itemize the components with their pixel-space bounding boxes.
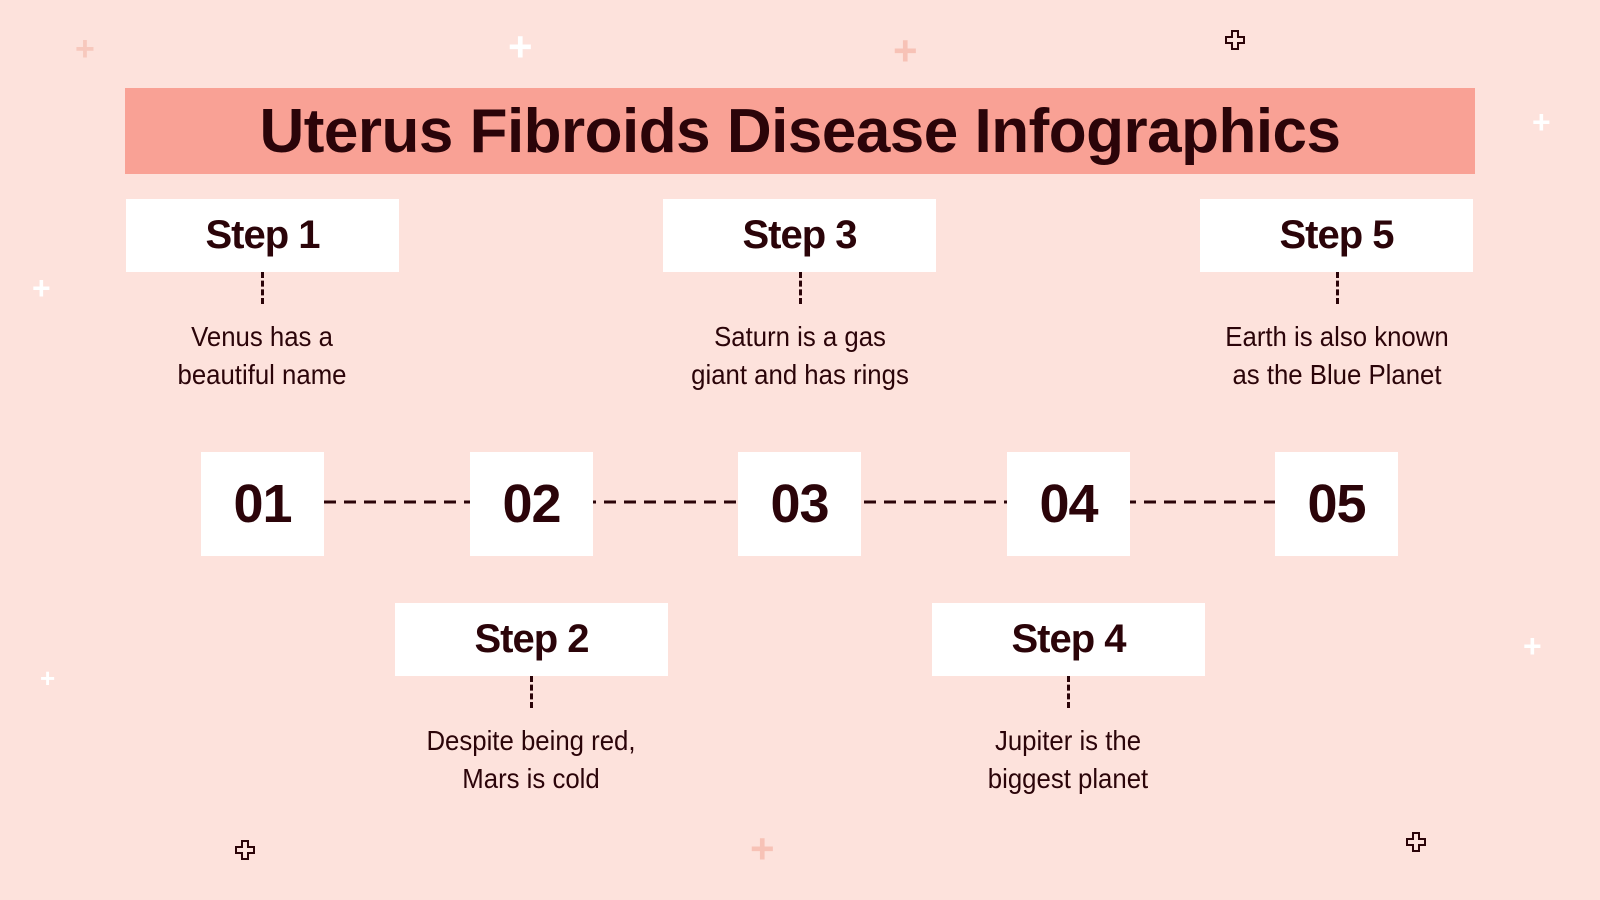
step 4 xyxy=(932,603,1205,794)
step 2: Mars is cold xyxy=(462,763,600,794)
number 04 xyxy=(1007,452,1130,556)
number 02: 02 xyxy=(502,474,561,534)
decorative plus signs: + xyxy=(40,663,55,693)
step 5: Step 5 xyxy=(1279,213,1394,257)
number 01: 01 xyxy=(233,474,292,534)
step 4: biggest planet xyxy=(988,763,1148,794)
title xyxy=(125,88,1475,174)
number 02 xyxy=(470,452,593,556)
decorative plus signs: + xyxy=(750,825,775,872)
decorative plus signs: + xyxy=(893,27,918,74)
step 2: Step 2 xyxy=(474,617,589,661)
step 5: Earth is also known xyxy=(1225,321,1449,352)
step 3 xyxy=(663,199,936,390)
step 1: Venus has a xyxy=(191,321,333,352)
number 05: 05 xyxy=(1307,474,1366,534)
step 3: giant and has rings xyxy=(691,359,909,390)
step 1 xyxy=(126,199,399,390)
step 4: Jupiter is the xyxy=(995,725,1141,756)
step 1: Step 1 xyxy=(205,213,320,257)
timeline dashed line xyxy=(324,500,1275,504)
number 01 xyxy=(201,452,324,556)
number 03: 03 xyxy=(770,474,829,534)
title: Uterus Fibroids Disease Infographics xyxy=(259,96,1341,166)
decorative plus signs: + xyxy=(1523,628,1542,664)
step 4: Step 4 xyxy=(1011,617,1126,661)
decorative plus signs: + xyxy=(75,30,95,68)
step 3: Step 3 xyxy=(742,213,857,257)
number 05 xyxy=(1275,452,1398,556)
step 3: Saturn is a gas xyxy=(714,321,886,352)
decorative plus signs: + xyxy=(508,23,533,70)
number 04: 04 xyxy=(1039,474,1098,534)
step 5: as the Blue Planet xyxy=(1232,359,1442,390)
step 5 xyxy=(1200,199,1473,390)
decorative plus signs: + xyxy=(1532,104,1551,140)
step 1: beautiful name xyxy=(178,359,346,390)
number 03 xyxy=(738,452,861,556)
step 2: Despite being red, xyxy=(426,725,636,756)
step 2 xyxy=(395,603,668,794)
decorative plus signs: + xyxy=(32,270,51,306)
